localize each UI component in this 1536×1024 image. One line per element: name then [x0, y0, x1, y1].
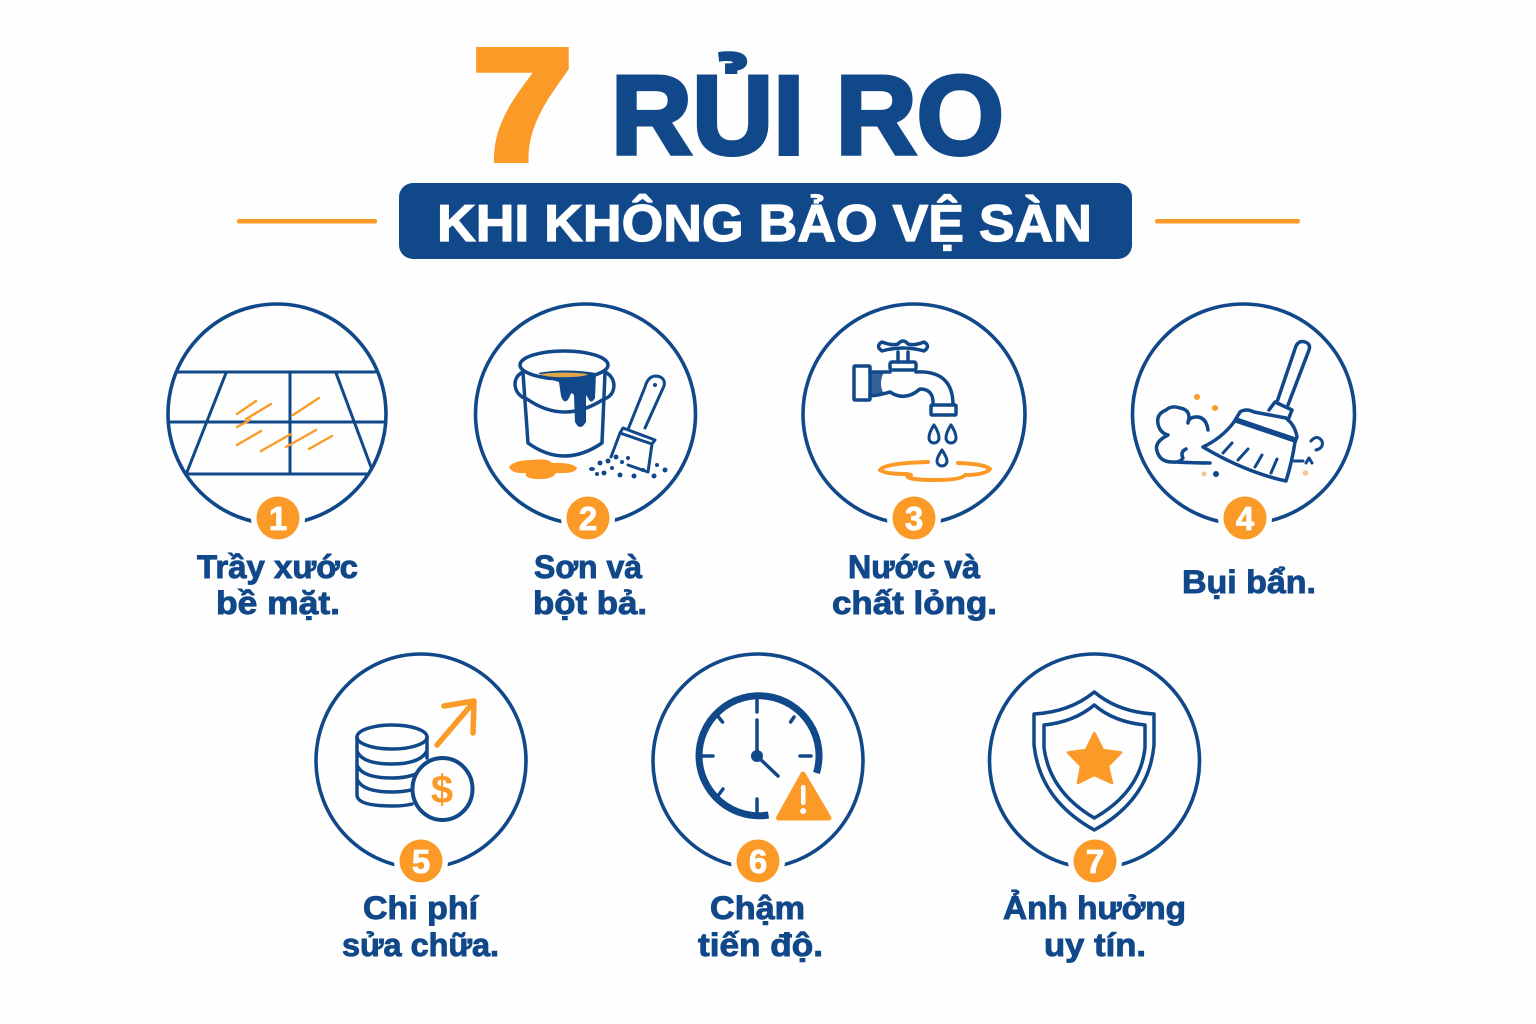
subtitle banner — [399, 183, 1132, 259]
title words: RỦI RO — [611, 53, 1004, 178]
badge 2: 2 — [579, 500, 597, 537]
label 7 — [1003, 890, 1186, 963]
title — [473, 18, 1004, 193]
badge 7: 7 — [1086, 843, 1104, 880]
ring 6 — [653, 654, 863, 868]
badge 4 — [1224, 496, 1266, 540]
ring 7 — [990, 654, 1200, 868]
ring 4 — [1132, 304, 1354, 524]
icon: dollar coin — [412, 758, 472, 820]
icon: coin stack — [357, 725, 427, 806]
icon: shield — [1034, 692, 1154, 830]
panel 3: water and liquids — [803, 304, 1025, 621]
panel 1: surface scratches — [168, 304, 386, 621]
label 4: Bụi bẩn. — [1182, 564, 1316, 600]
label 2: Sơn và — [534, 549, 642, 585]
panel 4: dust — [1132, 304, 1354, 600]
label 5: Chi phí — [363, 890, 479, 926]
badge 7 — [1074, 840, 1116, 882]
label 1 — [197, 549, 358, 621]
icon: rising arrow — [437, 701, 474, 745]
icon: dollar coin: $ — [431, 768, 453, 812]
ring 1 — [168, 304, 386, 524]
icon: warning triangle — [778, 774, 829, 818]
label 6: Chậm — [710, 890, 805, 926]
badge 3: 3 — [905, 500, 923, 537]
label 2: bột bả. — [533, 585, 647, 621]
panel 2: paint and putty — [476, 304, 696, 621]
label 1: Trầy xước — [197, 549, 358, 585]
icon: scratched floor tiles — [168, 372, 386, 474]
label 3: Nước và — [848, 549, 980, 585]
icon: putty brush and powder — [589, 376, 668, 478]
icon: paint bucket — [515, 351, 614, 456]
badge 1: 1 — [269, 500, 287, 537]
ring 3 — [803, 304, 1025, 524]
badge 4: 4 — [1236, 500, 1255, 537]
label 2 — [533, 549, 647, 621]
icon: clock — [699, 696, 819, 816]
panel 5: repair cost — [316, 654, 526, 963]
ring 2 — [476, 304, 696, 524]
badge 2 — [566, 496, 610, 540]
icon: water puddle — [880, 462, 990, 480]
label 3: chất lỏng. — [832, 585, 997, 621]
panel 6: schedule delay — [653, 654, 863, 963]
badge 1 — [256, 496, 300, 540]
icon: paint puddle — [509, 459, 577, 479]
icon: faucet — [854, 341, 956, 415]
badge 5: 5 — [412, 843, 430, 880]
subtitle text: KHI KHÔNG BẢO VỆ SÀN — [437, 194, 1092, 253]
label 1: bề mặt. — [216, 585, 340, 621]
label 3 — [832, 549, 997, 621]
icon: dust particles — [1194, 394, 1322, 477]
icon: water drops — [929, 425, 956, 466]
label 6: tiến độ. — [698, 927, 823, 963]
label 5 — [342, 890, 499, 963]
badge 6: 6 — [749, 843, 767, 880]
badge 3 — [892, 496, 936, 540]
ring 5 — [316, 654, 526, 868]
icon: dust cloud — [1156, 407, 1210, 463]
label 7: Ảnh hưởng — [1003, 890, 1186, 926]
icon: broom — [1203, 342, 1310, 481]
title numeral 7: 7 — [473, 18, 572, 193]
label 6 — [698, 890, 823, 963]
label 5: sửa chữa. — [342, 927, 499, 963]
panel 7: reputation — [990, 654, 1200, 963]
badge 6 — [736, 840, 780, 882]
label 7: uy tín. — [1044, 927, 1146, 963]
icon: star — [1068, 733, 1121, 783]
badge 5 — [400, 840, 442, 882]
